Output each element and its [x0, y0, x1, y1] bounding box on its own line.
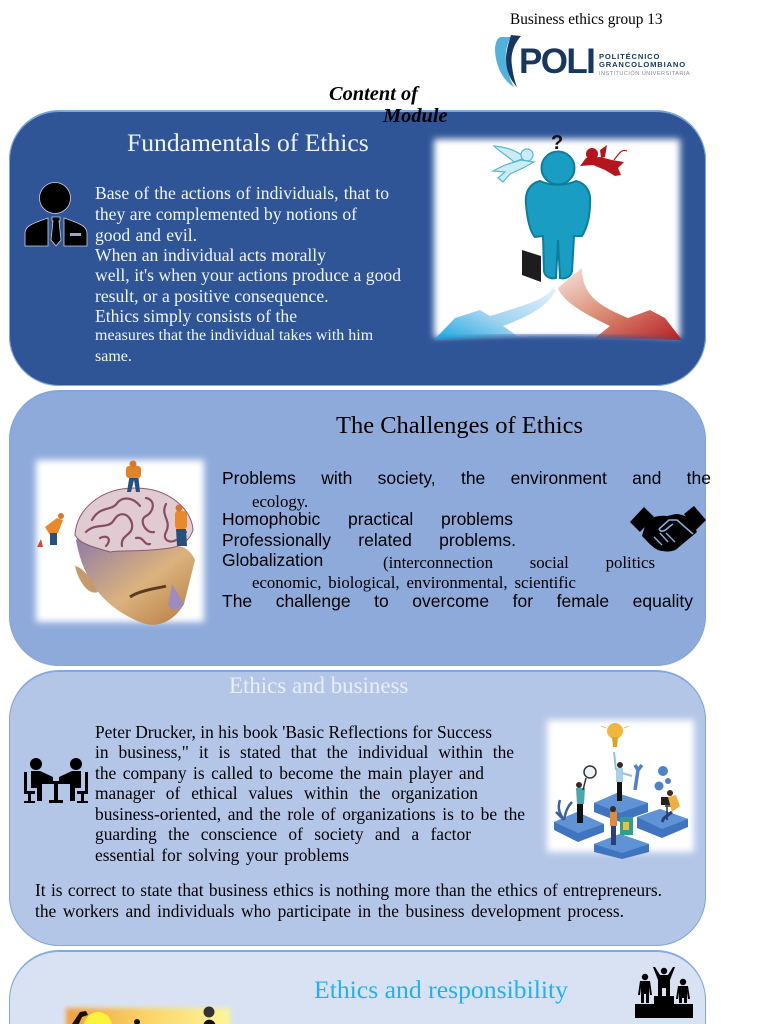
heading: fundamentals of ethics: Fundamentals of Ethics	[127, 128, 369, 157]
text block: Peter Drucker quote: the company is called to become the main player and	[95, 763, 484, 783]
text block: list of challenges: The challenge to overcome for female equality	[222, 591, 693, 611]
person with wrench	[614, 752, 642, 801]
illustration: brain with workers	[32, 456, 208, 626]
text block: Peter Drucker quote	[95, 722, 525, 865]
text block: definition of ethics: Base of the actions of individuals, that to	[95, 183, 389, 203]
head	[76, 536, 195, 625]
panel: fundamentals of ethics	[9, 110, 706, 386]
text block: Peter Drucker quote: manager of ethical values within the organization	[95, 783, 478, 803]
illustration: person at a moral crossroads	[428, 132, 686, 342]
text block: definition of ethics: result, or a positive consequence.	[95, 286, 329, 306]
heading: ethics and business: Ethics and business	[229, 673, 408, 698]
photo: sunset silhouettes	[62, 1004, 233, 1024]
text block: list of challenges: Homophobic practical problems	[222, 509, 513, 529]
worker on left	[37, 513, 64, 547]
panel: ethics and responsibility	[9, 950, 706, 1024]
panel: the challenges of ethics	[9, 390, 706, 666]
text block: Peter Drucker quote: guarding the conscience of society and a factor	[95, 824, 471, 844]
brain	[75, 488, 193, 552]
text block: definition of ethics	[95, 183, 401, 365]
person with magnifier	[576, 766, 596, 823]
title: content of module	[329, 83, 448, 127]
person at desk	[661, 790, 680, 822]
logo institution name	[599, 52, 690, 77]
logo swoosh	[495, 35, 521, 87]
illustration: team on puzzle pieces	[543, 716, 698, 859]
gears	[654, 766, 671, 790]
figure: blue person	[526, 152, 590, 278]
text block: Peter Drucker quote: Peter Drucker, in his book 'Basic Reflections for Success	[95, 722, 492, 742]
logo: Poli	[495, 35, 690, 87]
text block: definition of ethics: they are complemented by notions of	[95, 204, 357, 224]
panel: ethics and business	[9, 670, 706, 946]
icon: meeting at table	[24, 758, 88, 803]
heading: the challenges of ethics: The Challenges of Ethics	[336, 412, 583, 439]
text block: definition of ethics: same.	[95, 348, 132, 365]
group label: Business ethics group 13	[510, 11, 663, 28]
question mark: ?	[551, 132, 563, 154]
text block: definition of business ethics: the workers and individuals who participate in the business development process.	[35, 901, 624, 921]
angel	[493, 146, 534, 182]
plant	[556, 800, 572, 820]
worker on top	[126, 460, 141, 492]
text block: list of challenges: Problems with society, the environment and the	[222, 468, 711, 488]
text block: list of challenges: ecology.	[252, 492, 308, 511]
text block: Peter Drucker quote: in business," it is stated that the individual within the	[95, 742, 514, 762]
title: content of module: Module	[383, 105, 448, 127]
briefcase	[522, 250, 541, 282]
person with chart	[610, 806, 633, 845]
text block: list of challenges: economic, biological, environmental, scientific	[252, 573, 576, 592]
text block: list of challenges	[222, 468, 711, 611]
text block: definition of ethics: When an individual acts morally	[95, 245, 326, 265]
text block: definition of ethics: Ethics simply consists of the	[95, 306, 297, 326]
heading: ethics and responsibility: Ethics and responsibility	[314, 975, 568, 1004]
logo wordmark: POLI	[519, 42, 594, 81]
logo institution name: POLITÉCNICO	[599, 52, 660, 61]
worker on right	[175, 504, 187, 546]
logo institution name: GRANCOLOMBIANO	[599, 60, 686, 69]
icon: people on podium	[635, 967, 693, 1018]
text block: definition of ethics: measures that the individual takes with him	[95, 327, 373, 344]
text block: definition of ethics: well, it's when your actions produce a good	[95, 265, 401, 285]
text block: definition of ethics: good and evil.	[95, 225, 197, 245]
text block: list of challenges: Professionally related problems.	[222, 530, 516, 550]
light bulb	[601, 723, 629, 747]
puzzle platforms	[554, 793, 688, 859]
text block: definition of business ethics: It is correct to state that business ethics is nothing more than the ethics of entrepreneurs.	[35, 880, 662, 900]
text block: definition of business ethics	[35, 880, 662, 921]
icon: businessman	[24, 182, 88, 246]
devil	[580, 145, 627, 176]
text block: Peter Drucker quote: essential for solving your problems	[95, 845, 349, 865]
icon: handshake	[630, 506, 706, 552]
logo institution name: INSTITUCIÓN UNIVERSITARIA	[599, 71, 690, 77]
text block: list of challenges: Globalization	[222, 550, 323, 570]
title: content of module: Content of	[329, 83, 418, 105]
text block: list of challenges: (interconnection social politics	[383, 553, 655, 572]
text block: Peter Drucker quote: business-oriented, and the role of organizations is to be the	[95, 804, 525, 824]
